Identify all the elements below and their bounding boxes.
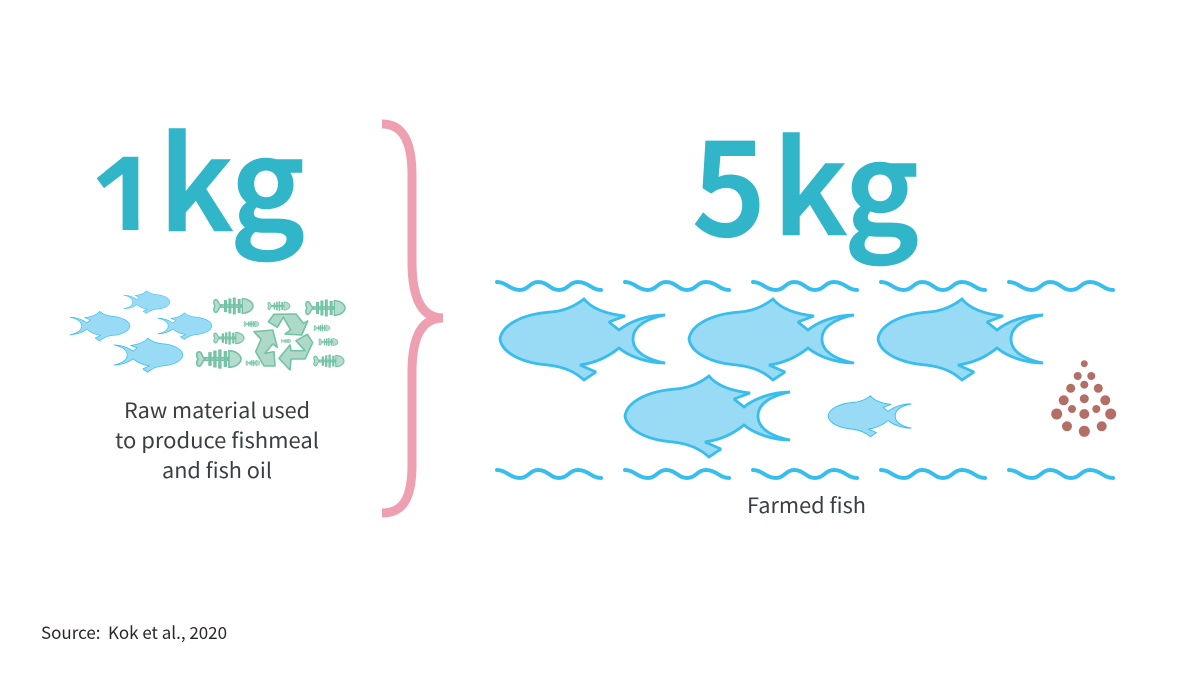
text: raw material caption: Raw material used [124, 395, 310, 425]
icon: fish bones [197, 298, 345, 368]
heading: 5kg: 5 [693, 85, 765, 273]
text: source: Source: Kok et al., 2020 [41, 619, 227, 644]
heading: 1kg: 1 [98, 137, 156, 253]
icon: recycling arrows [254, 314, 313, 370]
heading: 1kg: kg [159, 85, 304, 267]
icon: feed pellets [1051, 360, 1116, 437]
icon: small raw material fish school [70, 291, 212, 372]
waves: top row [497, 282, 1113, 290]
icon: farmed fish [500, 299, 1043, 457]
heading: 5kg [693, 85, 918, 273]
text: raw material caption [115, 395, 319, 485]
text: raw material caption: and fish oil [162, 455, 272, 485]
heading: 5kg: kg [773, 89, 918, 271]
curly brace [382, 124, 443, 513]
waves: bottom row [497, 470, 1113, 478]
text: raw material caption: to produce fishmeal [115, 425, 319, 455]
heading: 1kg [96, 128, 304, 262]
text: farmed fish caption: Farmed fish [747, 490, 866, 520]
